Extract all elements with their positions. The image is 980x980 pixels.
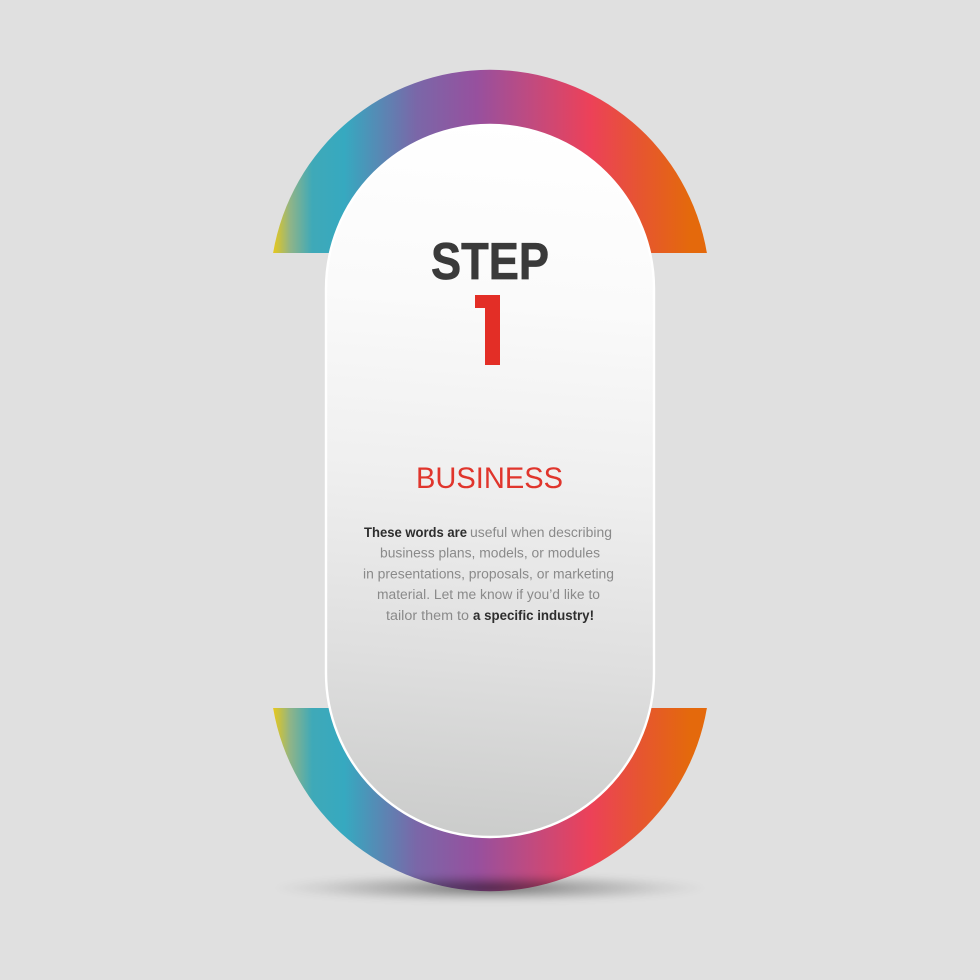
heading: step: STEP — [431, 233, 549, 291]
body text — [363, 525, 614, 623]
step number: 1 — [460, 273, 516, 387]
body text: in presentations, proposals, or marketing — [363, 566, 614, 582]
central capsule panel — [326, 125, 654, 837]
ground shadow — [272, 873, 708, 903]
body text: These words are — [364, 525, 467, 540]
body text: useful when describing — [470, 525, 612, 540]
bottom gradient arc — [273, 708, 707, 891]
body text: material. Let me know if you’d like to — [377, 587, 600, 602]
body text: a specific industry! — [473, 608, 594, 623]
body text: business plans, models, or modules — [380, 546, 600, 560]
title: business: BUSINESS — [416, 462, 563, 495]
top gradient arc — [273, 70, 707, 253]
body text: tailor them to — [386, 608, 469, 623]
